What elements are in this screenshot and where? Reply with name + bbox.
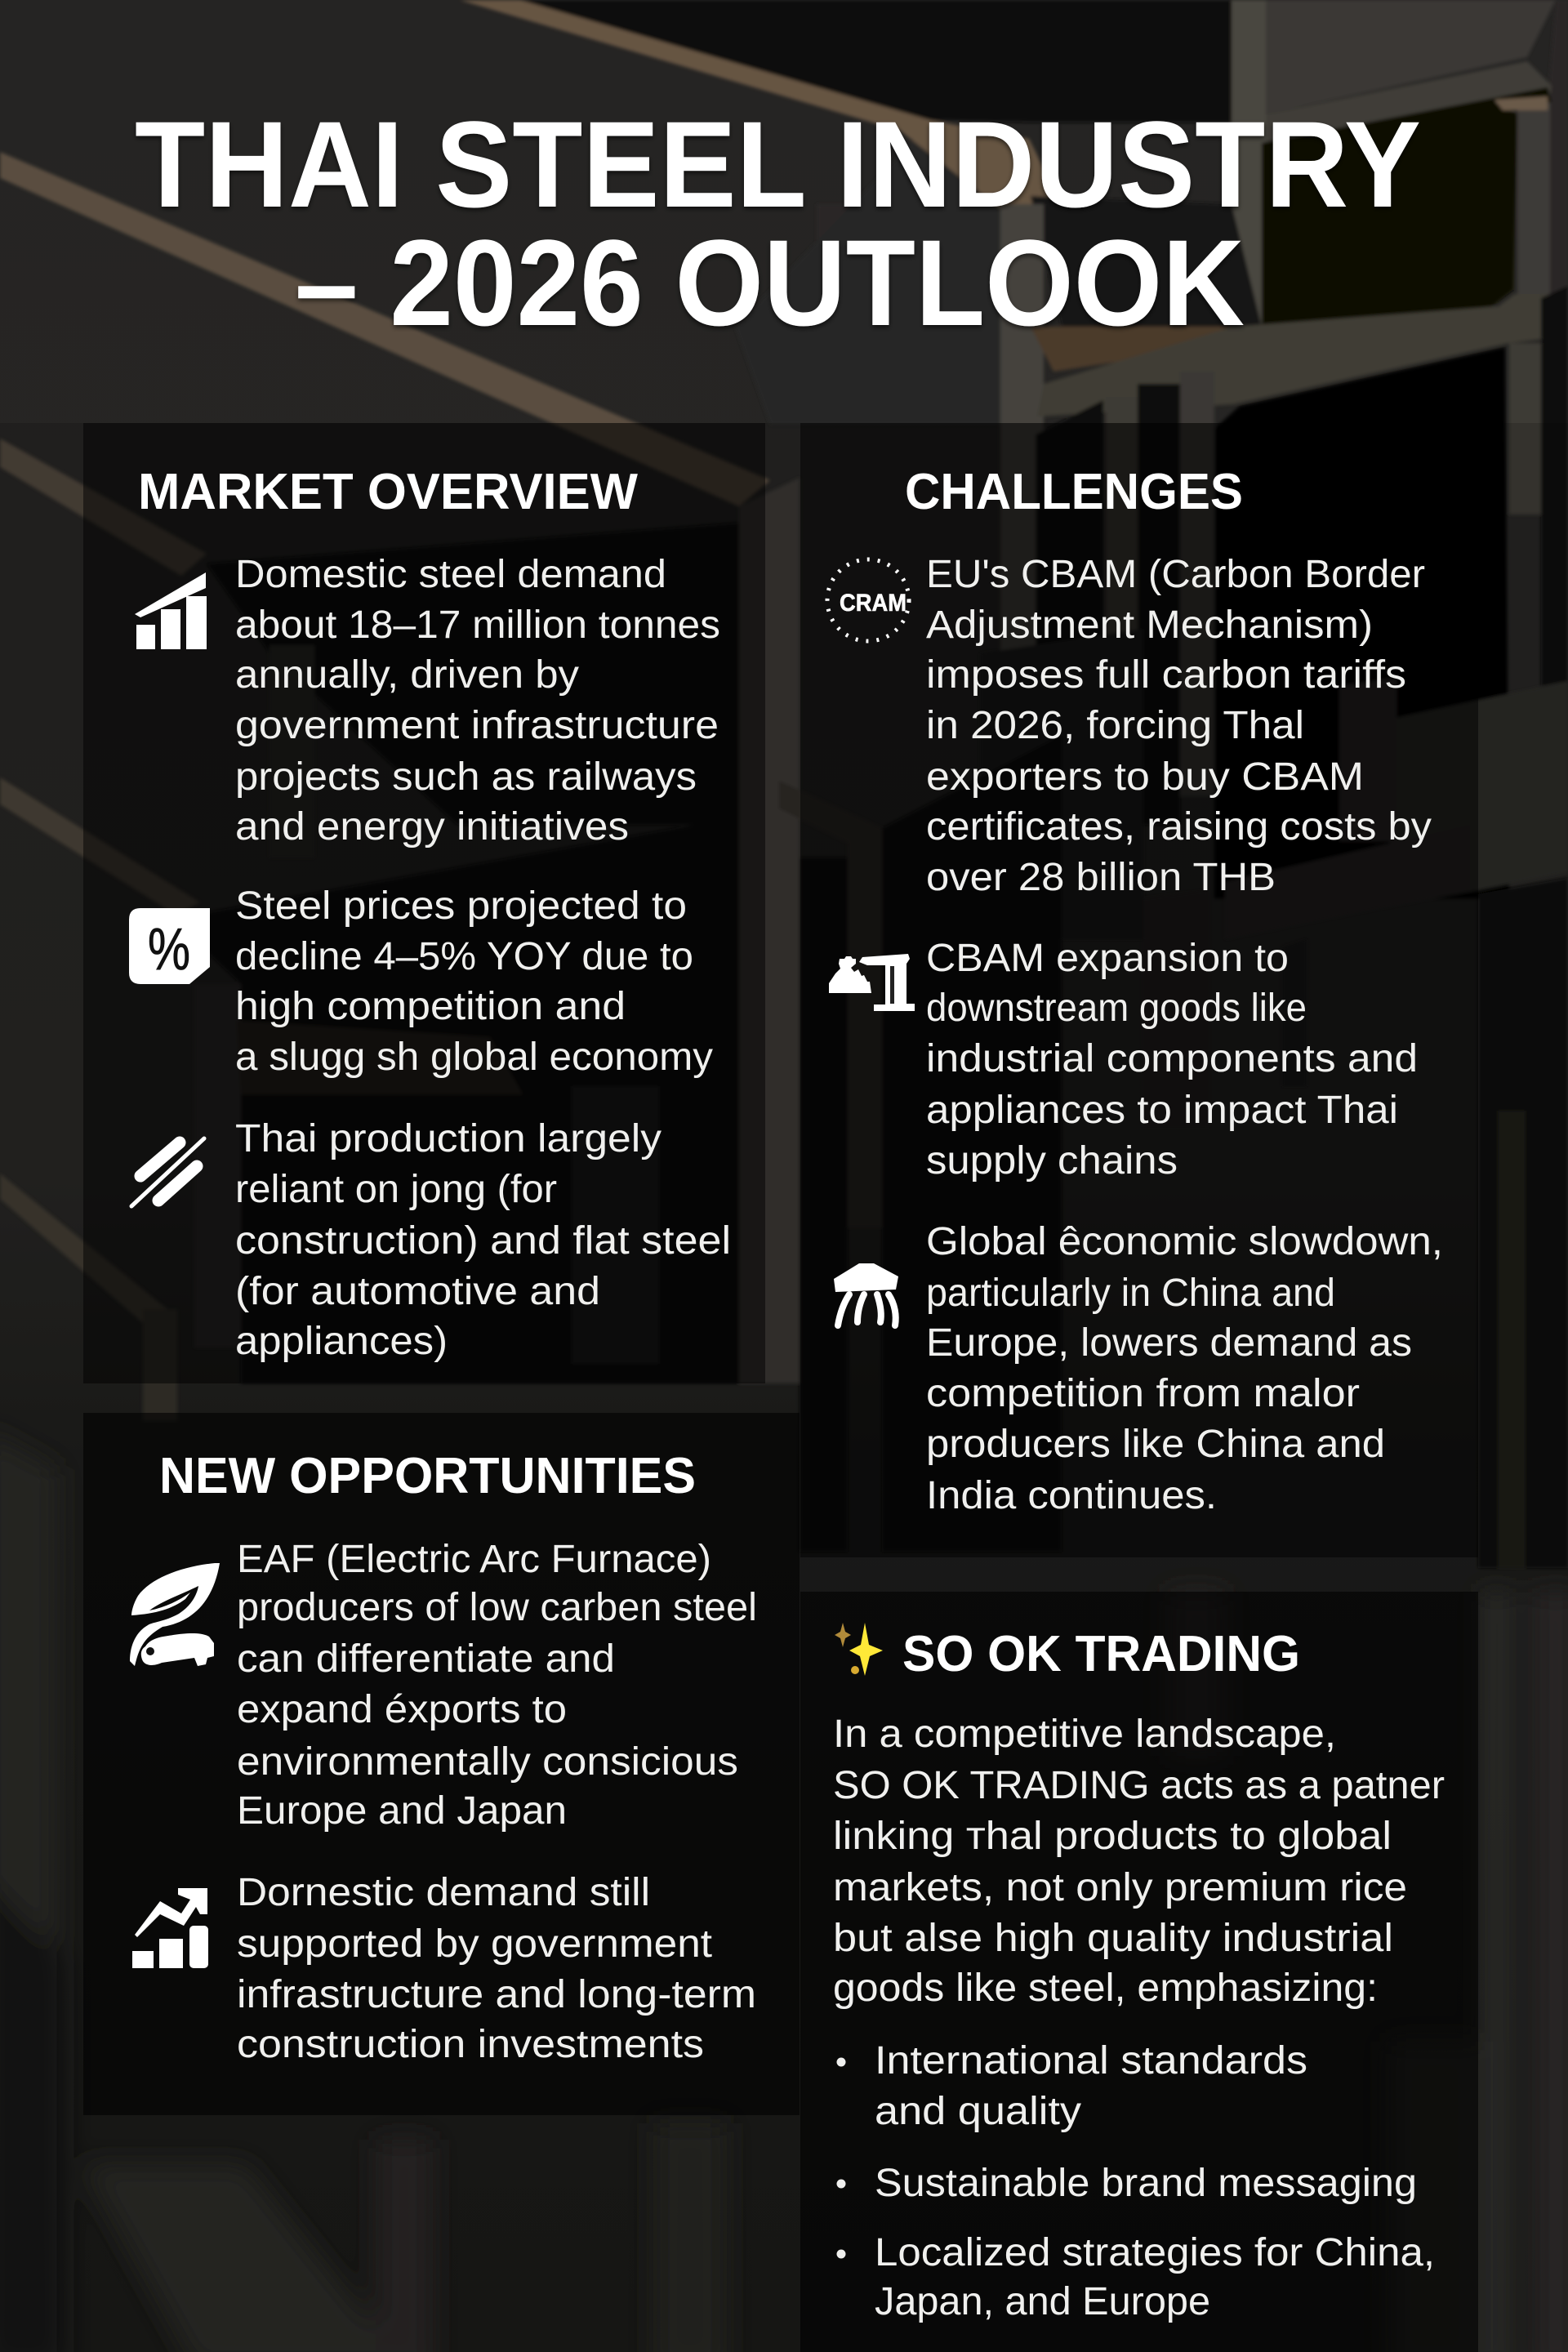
- panel: so ok trading: [833, 1623, 1445, 2323]
- text: EAF producers: environmentally consicious: [237, 1740, 738, 1784]
- text: domestic support: [237, 1871, 756, 2066]
- bullet list: and quality: [875, 2090, 1081, 2133]
- text: domestic support: Dornestic demand still: [237, 1871, 650, 1914]
- text: intro paragraph: linking тhal products to global: [833, 1815, 1392, 1858]
- heading: challenges: CHALLENGES: [905, 464, 1243, 520]
- text: intro paragraph: In a competitive landscape,: [833, 1713, 1336, 1756]
- text: production: reliant on jong (for: [235, 1168, 557, 1211]
- panel: new opportunities background: [83, 1413, 800, 2115]
- text: production: construction) and flat steel: [235, 1219, 731, 1263]
- icon: CBAM stamp: CRAM: [840, 590, 906, 617]
- text: production: (for automotive and: [235, 1270, 600, 1313]
- text: global slowdown: [926, 1220, 1443, 1517]
- heading: new opportunities: NEW OPPORTUNITIES: [159, 1448, 696, 1504]
- panel: challenges: [827, 464, 1443, 1517]
- text: EAF producers: expand éxports to: [237, 1688, 567, 1731]
- icon: leaf and car: [130, 1563, 220, 1666]
- text: EAF producers: [237, 1538, 757, 1833]
- panel: new opportunities: [130, 1448, 757, 2066]
- icon: growth chart with arrow: [132, 1888, 208, 1968]
- panel: so ok trading background: [800, 1592, 1478, 2352]
- panel: market overview: [129, 464, 731, 1363]
- text: steel prices: high competition and: [235, 985, 626, 1028]
- bullet list: [836, 2039, 1435, 2323]
- text: intro paragraph: but alse high quality industrial: [833, 1917, 1393, 1960]
- text: global slowdown: Global êconomic slowdown,: [926, 1220, 1443, 1263]
- panel: market overview background: [83, 423, 765, 1383]
- bullet list: Japan, and Europe: [875, 2280, 1210, 2323]
- text: global slowdown: India continues.: [926, 1474, 1217, 1517]
- text: intro paragraph: [833, 1713, 1445, 2010]
- text: domestic demand: Domestic steel demand: [235, 553, 666, 596]
- text: domestic demand: projects such as railways: [235, 755, 697, 799]
- text: domestic demand: government infrastructure: [235, 704, 719, 747]
- text: intro paragraph: SO OK TRADING acts as a patner: [833, 1764, 1445, 1807]
- text: CBAM expansion: industrial components and: [926, 1037, 1418, 1080]
- icon: percent tag: [129, 908, 210, 984]
- icon: rising bar chart: [135, 572, 207, 649]
- text: domestic demand: about 18–17 million tonnes: [235, 604, 720, 647]
- bullet list: Localized strategies for China,: [875, 2231, 1435, 2274]
- text: domestic support: construction investments: [237, 2023, 704, 2066]
- title: [135, 96, 1421, 351]
- text: domestic support: infrastructure and long-term: [237, 1973, 756, 2016]
- text: domestic demand: [235, 553, 720, 849]
- text: CBAM tariffs: over 28 billion THB: [926, 856, 1276, 899]
- text: CBAM expansion: appliances to impact Thai: [926, 1089, 1398, 1132]
- text: steel prices: Steel prices projected to: [235, 884, 687, 928]
- text: CBAM tariffs: EU's CBAM (Carbon Border: [926, 553, 1425, 596]
- text: CBAM tariffs: [926, 553, 1432, 899]
- text: global slowdown: producers like China and: [926, 1423, 1385, 1466]
- panel: challenges background: [800, 423, 1478, 1557]
- text: EAF producers: Europe and Japan: [237, 1789, 567, 1833]
- text: CBAM tariffs: in 2026, forcing Thal: [926, 704, 1304, 747]
- text: CBAM expansion: supply chains: [926, 1139, 1178, 1183]
- title: THAI STEEL INDUSTRY: [135, 96, 1421, 233]
- text: EAF producers: can differentiate and: [237, 1637, 615, 1681]
- text: domestic demand: and energy initiatives: [235, 805, 629, 849]
- bullet list: Sustainable brand messaging: [875, 2162, 1417, 2205]
- text: intro paragraph: goods like steel, emphasizing:: [833, 1967, 1378, 2010]
- text: production: Thai production largely: [235, 1117, 662, 1160]
- text: production: [235, 1117, 731, 1363]
- text: steel prices: a slugg sh global economy: [235, 1036, 713, 1079]
- icon: CBAM stamp: [827, 559, 909, 641]
- icon: steel rebars: [131, 1138, 204, 1206]
- text: steel prices: decline 4–5% YOY due to: [235, 935, 693, 978]
- text: EAF producers: EAF (Electric Arc Furnace): [237, 1538, 711, 1581]
- text: intro paragraph: markets, not only premium rice: [833, 1866, 1407, 1909]
- heading: so ok trading: SO OK TRADING: [902, 1626, 1300, 1682]
- bullet list: International standards: [875, 2039, 1307, 2082]
- text: CBAM tariffs: exporters to buy CBAM: [926, 755, 1364, 799]
- text: steel prices: [235, 884, 713, 1079]
- text: EAF producers: producers of low carben steel: [237, 1586, 757, 1629]
- icon: cloud with drips: [834, 1263, 898, 1325]
- text: CBAM tariffs: imposes full carbon tariffs: [926, 653, 1406, 697]
- text: CBAM tariffs: certificates, raising costs by: [926, 805, 1432, 849]
- icon: sparkles: [835, 1623, 883, 1676]
- heading: market overview: MARKET OVERVIEW: [138, 464, 638, 520]
- icon: percent tag: %: [148, 917, 190, 982]
- text: production: appliances): [235, 1320, 448, 1363]
- icon: factory and goods: [829, 954, 915, 1011]
- text: domestic support: supported by government: [237, 1922, 712, 1966]
- text: global slowdown: Europe, lowers demand as: [926, 1321, 1412, 1365]
- text: global slowdown: particularly in China and: [926, 1272, 1335, 1315]
- title: – 2026 OUTLOOK: [295, 214, 1245, 351]
- text: CBAM expansion: [926, 937, 1418, 1183]
- text: CBAM expansion: downstream goods like: [926, 987, 1307, 1030]
- text: domestic demand: annually, driven by: [235, 653, 579, 697]
- text: global slowdown: competition from malor: [926, 1372, 1360, 1415]
- text: CBAM tariffs: Adjustment Mechanism): [926, 604, 1373, 647]
- text: CBAM expansion: CBAM expansion to: [926, 937, 1289, 980]
